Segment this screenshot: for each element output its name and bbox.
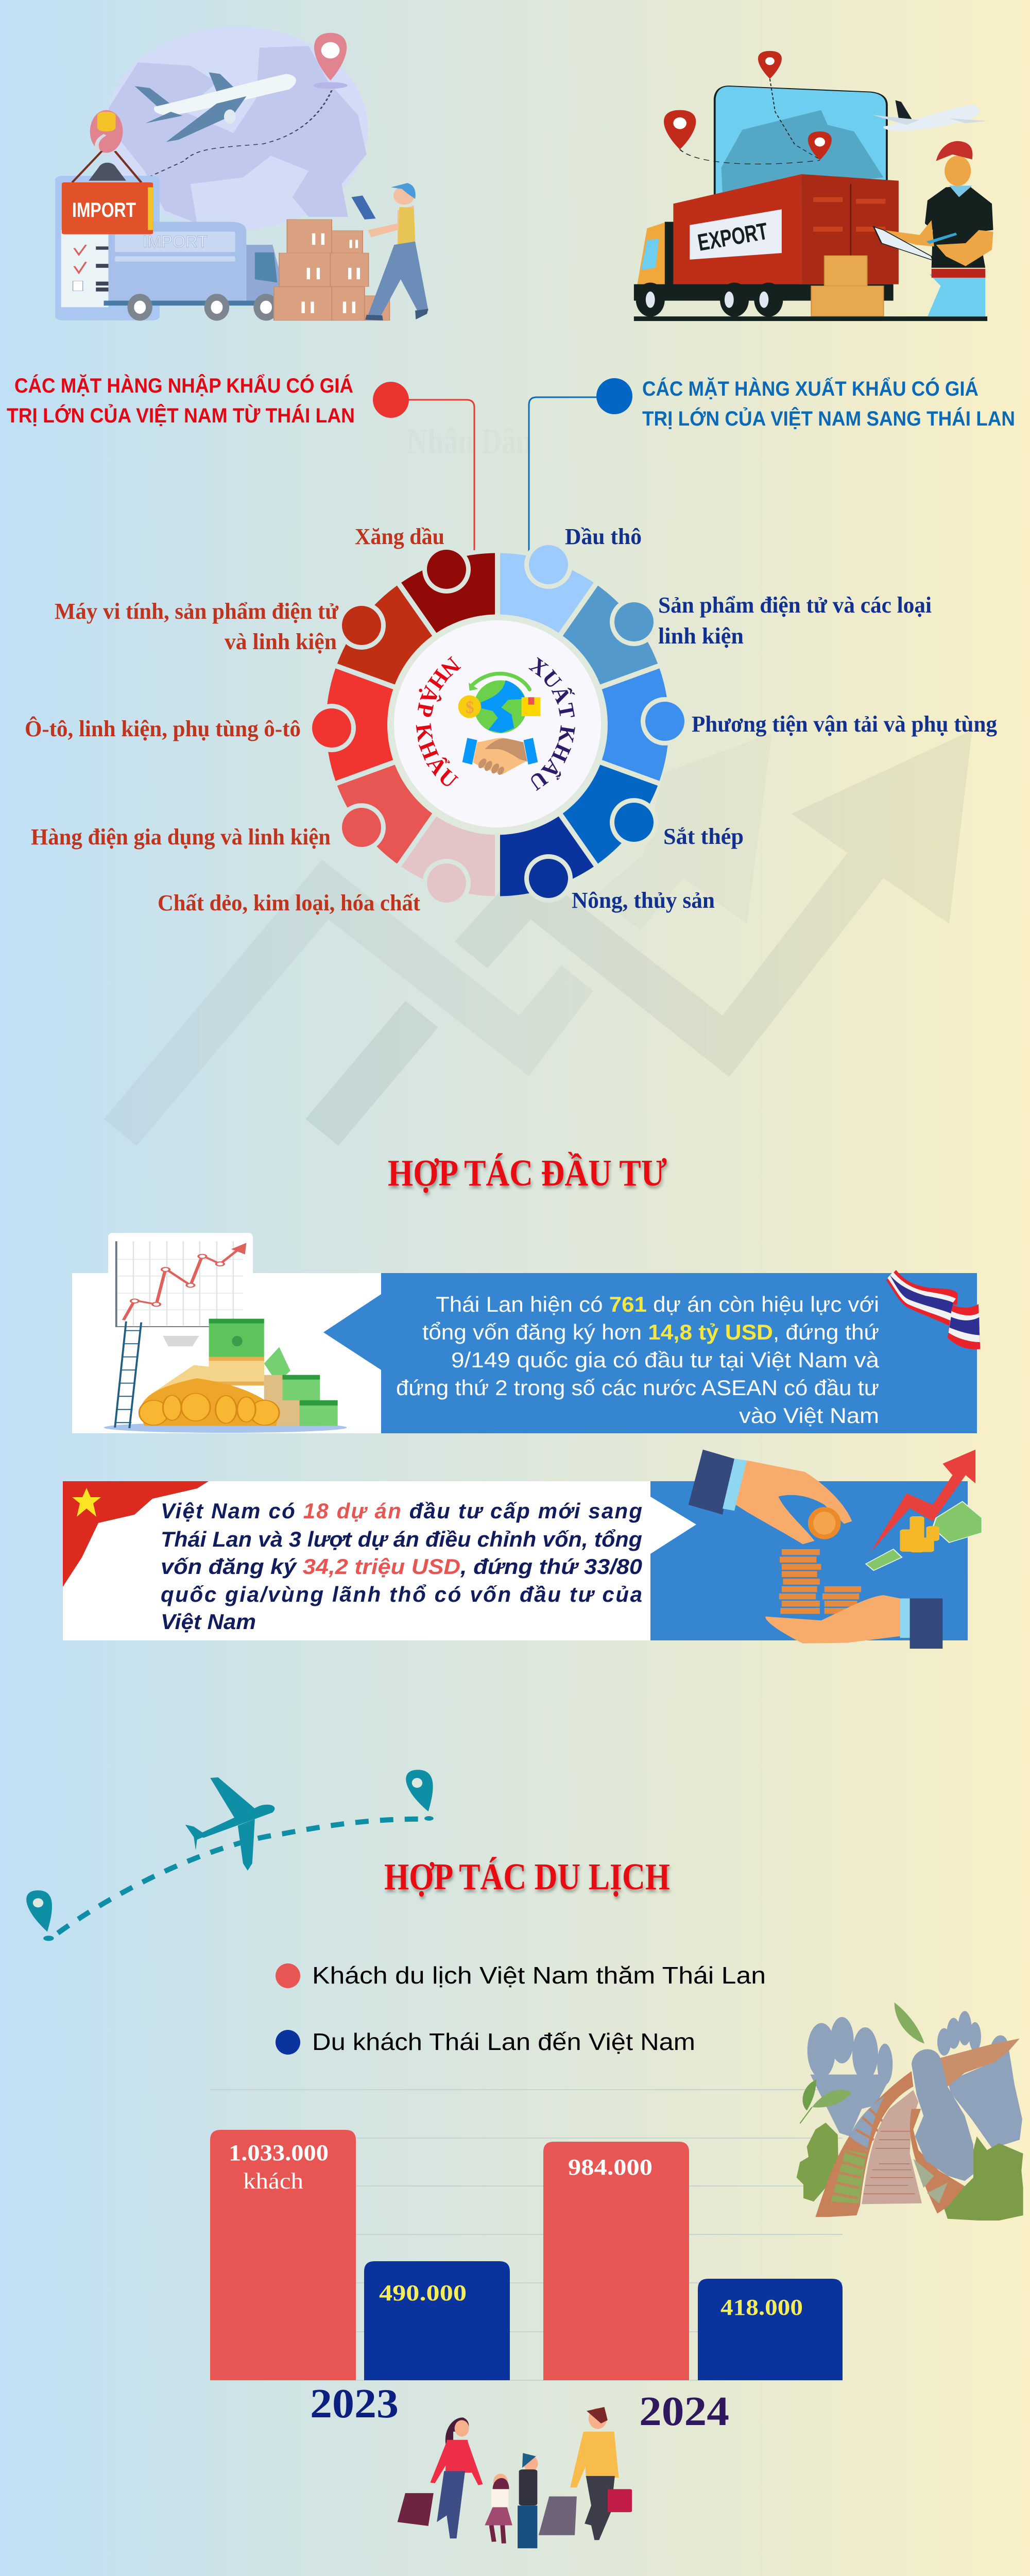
background rising arrows pattern [104, 730, 972, 1146]
year labels: 2023 [310, 2381, 399, 2427]
girl [493, 2473, 508, 2490]
heading: exports [642, 376, 1015, 430]
text: Vietnam investment [161, 1499, 642, 1634]
heading: imports: TRỊ LỚN CỦA VIỆT NAM TỪ THÁI LAN [7, 403, 355, 427]
hanging container [90, 110, 123, 153]
worker [351, 195, 376, 219]
ring diagram [312, 545, 684, 903]
export label text: EXPORT [696, 217, 770, 256]
text: Thailand investment: tổng vốn đăng ký hơn 14,8 tỷ USD , đứng thứ [422, 1320, 879, 1344]
heading: imports: CÁC MẶT HÀNG NHẬP KHẨU CÓ GIÁ [14, 373, 353, 397]
boy [524, 2455, 538, 2471]
year labels [310, 2381, 729, 2434]
export segments [500, 553, 669, 896]
text: Thailand investment: đứng thứ 2 trong số các nước ASEAN có đầu tư [396, 1376, 879, 1400]
truck [636, 222, 673, 293]
man [928, 275, 985, 316]
illustration: import [55, 26, 428, 320]
icon: plane route [26, 1770, 434, 1941]
clipboard and truck [55, 176, 160, 320]
export item labels: Sản phẩm điện tử và các loại [658, 592, 932, 618]
import item labels: Máy vi tính, sản phẩm điện tử [55, 599, 339, 624]
export item labels: linh kiện [658, 623, 744, 649]
section title: investment: HỢP TÁC ĐẦU TƯ [388, 1151, 667, 1194]
icon: hands and coins [689, 1450, 982, 1649]
bar chart: tourists: 1.033.000 [229, 2140, 329, 2165]
connector: imports [373, 382, 474, 550]
icon: travelling family [398, 2407, 632, 2548]
illustration: export [634, 51, 993, 321]
woman [445, 2417, 469, 2453]
legend: Khách du lịch Việt Nam thăm Thái Lan [312, 1962, 766, 1989]
text: Vietnam investment: vốn đăng ký 34,2 triệu USD , đứng thứ 33/80 [161, 1554, 642, 1579]
import item labels: và linh kiện [225, 629, 337, 654]
import item labels: Ô-tô, linh kiện, phụ tùng ô-tô [25, 716, 301, 741]
ring text: import: NHẬP KHẨU [416, 656, 461, 786]
legend [276, 1962, 766, 2055]
boxes [274, 219, 389, 320]
icon: Vietnam flag corner [63, 1481, 209, 1587]
text: Thailand investment: vào Việt Nam [739, 1403, 879, 1428]
text: Thailand investment: Thái Lan hiện có 761 dự án còn hiệu lực với [436, 1292, 879, 1316]
year labels: 2024 [639, 2389, 729, 2434]
heading: imports [7, 373, 355, 427]
text: Thailand investment: 9/149 quốc gia có đầu tư tại Việt Nam và [451, 1348, 880, 1372]
bar chart: tourists: khách [243, 2168, 303, 2194]
ring text: export: XUẤT KHẨU [528, 657, 575, 791]
icon: golden bridge [797, 2003, 1023, 2221]
icon: chart with money [104, 1241, 347, 1433]
center icon: globe and handshake [458, 673, 540, 776]
connector: exports [529, 378, 632, 555]
father [589, 2408, 607, 2429]
section title: tourism: HỢP TÁC DU LỊCH [384, 1856, 670, 1897]
bar chart: tourists: 984.000 [568, 2155, 653, 2180]
center icon: globe and handshake: $ [466, 698, 474, 717]
import segments [326, 553, 495, 896]
import labels: IMPORT [143, 232, 208, 251]
segment nodes [307, 540, 689, 907]
text: Vietnam investment: Việt Nam [161, 1609, 256, 1634]
export item labels: Phương tiện vận tải và phụ tùng [692, 711, 997, 737]
import item labels: Chất dẻo, kim loại, hóa chất [158, 890, 420, 916]
import item labels: Xăng dầu [355, 524, 444, 549]
export item labels: Dầu thô [565, 524, 642, 549]
plane [896, 100, 912, 119]
watermark: Nhân Dân [407, 422, 532, 462]
bar chart: tourists [210, 2090, 843, 2434]
panel: Vietnam investment [63, 1450, 982, 1649]
legend: Du khách Thái Lan đến Việt Nam [312, 2028, 695, 2055]
import item labels: Hàng điện gia dụng và linh kiện [31, 824, 331, 850]
bar chart: tourists: 490.000 [379, 2280, 467, 2306]
text: Thailand investment [396, 1292, 880, 1428]
text: Vietnam investment: Việt Nam có 18 dự án đầu tư cấp mới sang [161, 1499, 642, 1523]
import item labels [25, 524, 444, 916]
import labels: IMPORT [72, 199, 136, 222]
import labels [72, 199, 208, 251]
bar chart: tourists: 418.000 [720, 2295, 803, 2320]
text: Vietnam investment: quốc gia/vùng lãnh thổ có vốn đầu tư của [161, 1582, 642, 1606]
text: Vietnam investment: Thái Lan và 3 lượt dự án điều chỉnh vốn, tổng [161, 1527, 642, 1551]
export item labels [565, 524, 997, 913]
panel: Thailand investment [72, 1233, 980, 1433]
icon: Thai flag [886, 1270, 980, 1349]
heading: exports: CÁC MẶT HÀNG XUẤT KHẨU CÓ GIÁ [642, 376, 978, 400]
export item labels: Sắt thép [663, 824, 744, 849]
export item labels: Nông, thủy sản [572, 888, 715, 913]
